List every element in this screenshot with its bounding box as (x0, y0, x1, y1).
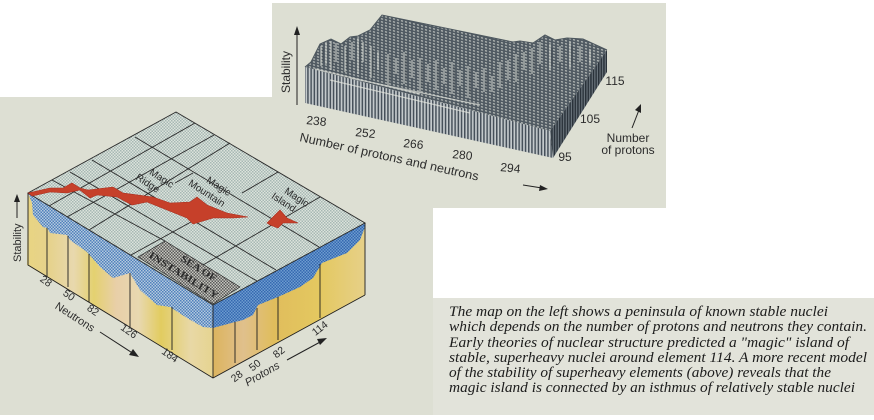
axis ticks: neutrons: 82 (84, 302, 101, 319)
axis: stability arrow and label (top chart): Stability (279, 51, 293, 93)
chart: 3D stability histogram (305, 15, 607, 158)
label: magic mountain: Mountain (186, 178, 227, 210)
caption text: of the stability of superheavy elements (above) reveals that the (449, 365, 832, 381)
caption text: Early theories of nuclear structure predicted a "magic" island of (448, 335, 851, 351)
sea of instability (138, 241, 240, 304)
axis: stability arrow and label (map): Stability (12, 223, 24, 262)
chart front wall (305, 67, 553, 158)
axis ticks: protons and neutrons: 252 (355, 125, 376, 141)
chart outline spikes (305, 15, 607, 67)
axis ticks: protons (map): 114 (310, 319, 331, 339)
axis ticks: protons (map) (229, 319, 331, 385)
axis ticks: protons and neutrons: 280 (452, 147, 473, 163)
axis label: protons with arrow: Protons (243, 359, 282, 389)
axis ticks: neutrons: 50 (60, 287, 77, 304)
arrow: number of protons direction (632, 104, 641, 128)
map grid lines (49, 123, 320, 281)
axis ticks: protons (map): 50 (247, 357, 264, 374)
label: magic mountain: Magic (204, 175, 233, 199)
chart dark shadow columns (323, 42, 572, 94)
label: magic ridge: Ridge (133, 172, 162, 196)
axis ticks: protons and neutrons: 294 (500, 160, 521, 176)
panel: background of top chart (272, 3, 666, 208)
label: magic ridge (133, 167, 176, 196)
caption text: The map on the left shows a peninsula of known stable nuclei (449, 304, 828, 320)
axis ticks: neutrons: 28 (37, 273, 54, 290)
label: number of protons: of protons (601, 143, 655, 157)
label: magic island: Island (269, 191, 298, 215)
axis ticks: protons and neutrons: 238 (306, 113, 327, 129)
arrow: protons and neutrons direction (523, 185, 548, 191)
map right face (213, 223, 365, 378)
axis ticks: protons and neutrons (306, 113, 521, 176)
axis label: neutrons with arrow: Neutrons (53, 300, 97, 335)
caption text: magic island is connected by an isthmus of relatively stable nuclei (449, 380, 855, 396)
axis ticks: neutrons: 126 (118, 322, 139, 342)
map left face (27, 193, 213, 378)
label: number of protons: Number (607, 131, 649, 145)
magic ridge and mountain in red (28, 183, 248, 224)
label: number of protons (601, 131, 655, 157)
caption text (448, 304, 867, 396)
map top surface (28, 112, 365, 305)
axis: stability arrow and label (top chart) (279, 26, 300, 105)
caption text: stable, superheavy nuclei around element 114. A more recent model (449, 350, 867, 366)
axis ticks: protons (558, 74, 625, 164)
map: isometric nuclear stability block (27, 112, 365, 378)
panel: background of left map (0, 97, 433, 415)
axis ticks: protons: 115 (605, 74, 625, 88)
chart side wall (550, 50, 607, 158)
axis label: neutrons with arrow (53, 300, 139, 357)
map left blue water (28, 193, 213, 328)
axis ticks: protons (map): 82 (271, 344, 288, 361)
magic number dividing lines on faces (28, 193, 365, 378)
axis label: protons with arrow (243, 338, 327, 389)
axis ticks: protons and neutrons: 266 (403, 136, 424, 152)
axis ticks: protons: 95 (558, 150, 572, 164)
sea of instability: SEA OF (178, 254, 218, 284)
label: magic island (269, 186, 311, 215)
axis ticks: protons (map): 28 (229, 368, 246, 385)
magic island (267, 210, 298, 228)
chart isthmus ridge highlights (315, 38, 590, 113)
label: magic island: Magic (282, 186, 311, 210)
label: magic ridge: Magic (147, 167, 176, 191)
chart surface (305, 15, 607, 131)
caption text: which depends on the number of protons and neutrons they contain. (449, 319, 867, 335)
axis ticks: neutrons: 184 (159, 346, 180, 366)
sea of instability: INSTABILITY (146, 250, 221, 302)
axis ticks: neutrons (37, 273, 180, 366)
panel: caption background (433, 298, 874, 415)
axis: stability arrow and label (map) (12, 194, 24, 262)
axis ticks: protons: 105 (580, 112, 600, 126)
map right blue water (213, 223, 365, 328)
axis label: number of protons and neutrons: Number of protons and neutrons (298, 130, 480, 184)
